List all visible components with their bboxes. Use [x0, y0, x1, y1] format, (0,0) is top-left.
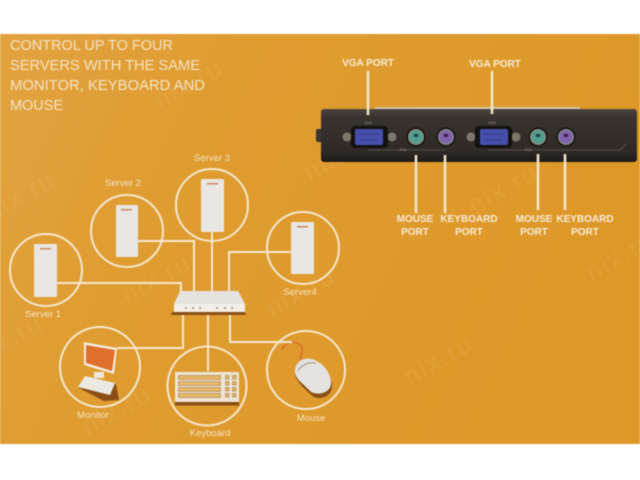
title: CONTROL UP TO FOUR	[10, 37, 173, 54]
label: mouse port 1: MOUSE	[397, 214, 434, 225]
label: keyboard port 2: PORT	[571, 227, 599, 238]
label: server 1: Server 1	[25, 309, 61, 320]
label: mouse: Mouse	[297, 413, 325, 424]
device: KVM rear panel: PC3	[525, 148, 531, 152]
title: SERVERS WITH THE SAME	[10, 57, 200, 74]
label: keyboard port 1: PORT	[455, 227, 483, 238]
label: mouse port 2	[516, 214, 553, 238]
device: KVM rear panel: VGA	[364, 121, 372, 125]
watermarks: nix.ru	[148, 51, 228, 115]
mouse port 1	[406, 128, 426, 146]
label: VGA port right: VGA PORT	[469, 59, 521, 70]
label: server 4: Server4	[283, 287, 317, 298]
icon: server 4	[267, 212, 339, 284]
icon: server 1	[10, 234, 82, 306]
label: keyboard port 2	[556, 214, 614, 238]
label: keyboard port 1: KEYBOARD	[440, 214, 498, 225]
watermarks: nix.ru	[260, 259, 340, 323]
device: KVM rear panel	[316, 107, 637, 162]
port pointer lines	[368, 71, 565, 213]
label: server 2: Server 2	[105, 178, 141, 189]
mouse port 2	[528, 128, 548, 146]
watermarks: nix.ru	[298, 123, 378, 187]
label: monitor: Monitor	[77, 410, 109, 421]
label: mouse port 1	[397, 214, 434, 238]
keyboard port 2	[556, 128, 576, 146]
label: mouse port 1: PORT	[401, 227, 429, 238]
watermarks: nix.ru	[398, 327, 478, 391]
connection lines	[57, 232, 292, 371]
VGA port 1	[342, 126, 396, 148]
icon: server 2	[91, 195, 163, 267]
label: VGA port left: VGA PORT	[342, 58, 394, 69]
keyboard port 1	[436, 128, 456, 146]
title	[10, 37, 205, 114]
label: keyboard port 2: KEYBOARD	[556, 214, 614, 225]
label: keyboard: Keyboard	[190, 428, 230, 439]
label: mouse port 2: PORT	[520, 227, 548, 238]
watermarks: nix.ru	[76, 377, 156, 441]
device: KVM rear panel: VGA	[488, 121, 496, 125]
VGA port 2	[466, 126, 520, 148]
icon: KVM switch	[171, 291, 246, 315]
icon: monitor	[60, 327, 140, 407]
label: server 3: Server 3	[194, 153, 230, 164]
device: KVM rear panel: PC4	[400, 148, 406, 152]
watermarks: nix.ru	[463, 156, 543, 220]
icon: keyboard	[168, 346, 246, 426]
icon: server 3	[176, 169, 248, 241]
title: MOUSE	[10, 97, 63, 114]
watermarks: nix.ru	[116, 246, 196, 310]
icon: mouse	[267, 331, 345, 409]
label: keyboard port 1	[440, 214, 498, 238]
title: MONITOR, KEYBOARD AND	[10, 77, 205, 94]
label: mouse port 2: MOUSE	[516, 214, 553, 225]
